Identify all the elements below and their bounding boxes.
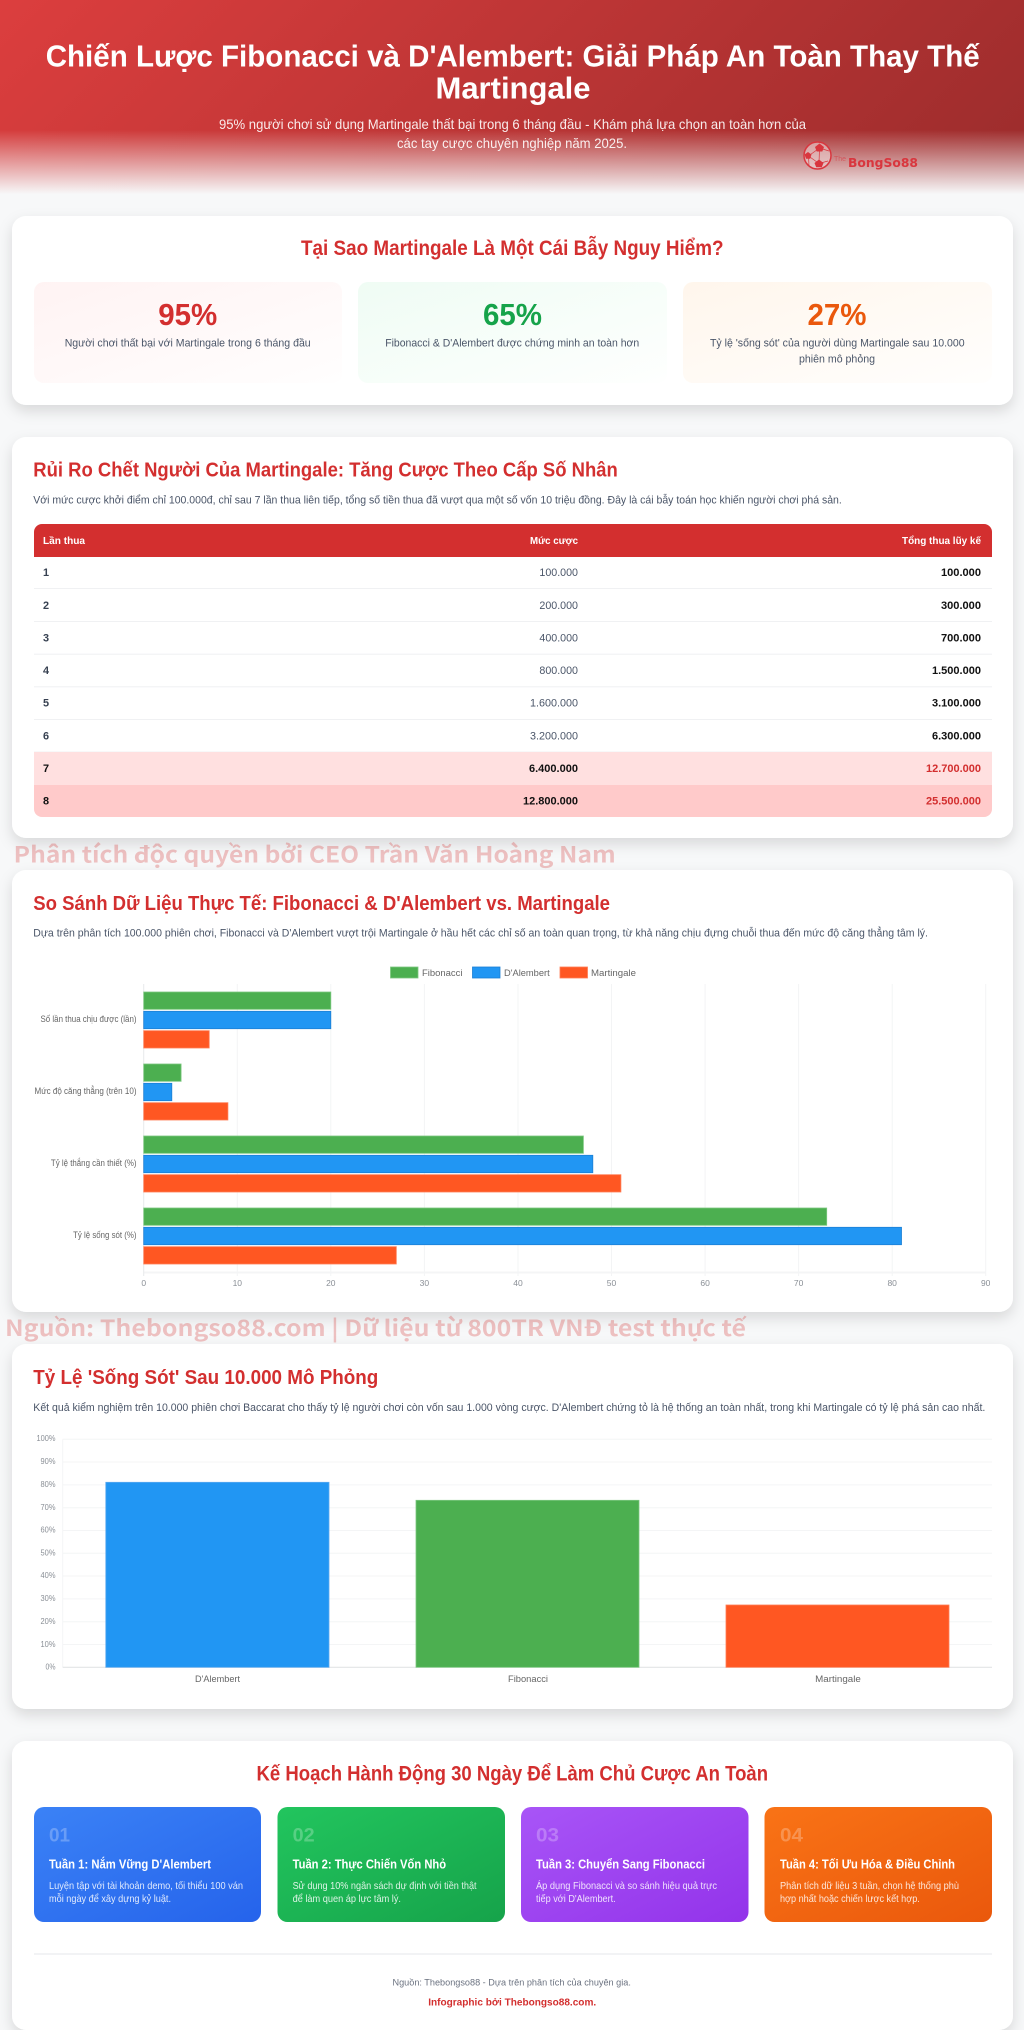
table: 4 xyxy=(43,665,49,677)
table: Lần thua xyxy=(43,535,85,547)
y axis ticks: 80% xyxy=(40,1479,56,1489)
stat card: 95%: Người chơi thất bại với Martingale trong 6 tháng đầu xyxy=(65,338,311,350)
table: 6.400.000 xyxy=(529,763,578,775)
stat card: 65%: Fibonacci & D'Alembert được chứng minh an toàn hơn xyxy=(385,338,639,350)
legend: Fibonacci xyxy=(422,968,463,978)
table: 1 xyxy=(43,567,49,579)
panel: survival rate xyxy=(12,1344,1013,1709)
y axis ticks: 100% xyxy=(36,1433,56,1443)
y axis ticks: 10% xyxy=(40,1639,56,1649)
title: Martingale xyxy=(436,72,590,106)
step card: week 4: 04 xyxy=(780,1826,803,1847)
footer source: Nguồn: Thebongso88 - Dựa trên phân tích của chuyên gia. xyxy=(392,1978,631,1989)
stat card: 65%: 65% xyxy=(483,298,542,332)
bars: Tỷ lệ thắng cần thiết: Tỷ lệ thắng cần thiết (%) xyxy=(51,1158,137,1168)
x axis ticks: 30 xyxy=(420,1278,429,1288)
table xyxy=(34,524,992,817)
legend xyxy=(390,967,636,978)
step card: week 4: hợp nhất hoặc chiến lược kết hợp. xyxy=(780,1893,920,1905)
stat card: 27%: Tỷ lệ 'sống sót' của người dùng Martingale sau 10.000 xyxy=(710,338,965,350)
step card: week 2: để làm quen áp lực tâm lý. xyxy=(293,1893,401,1905)
bars: Số lần thua chịu được: Số lần thua chịu được (lần) xyxy=(40,1014,137,1024)
table: 1.500.000 xyxy=(932,665,981,677)
table: 100.000 xyxy=(941,567,981,579)
table: 8 xyxy=(43,795,49,807)
bars: Mức độ căng thẳng xyxy=(34,1064,228,1120)
subtitle: 95% người chơi sử dụng Martingale thất bại trong 6 tháng đầu - Khám phá lựa chọn an toàn hơn của xyxy=(219,117,806,132)
panel: why Martingale is a trap xyxy=(12,216,1013,405)
step card: week 4: Phân tích dữ liệu 3 tuần, chọn hệ thống phù xyxy=(780,1880,959,1892)
step card: week 1: Tuần 1: Nắm Vững D'Alembert xyxy=(49,1857,212,1872)
bar: D'Alembert 81%: D'Alembert xyxy=(195,1674,241,1684)
table: 1.600.000 xyxy=(530,698,578,710)
title xyxy=(46,40,980,106)
stat card: 95% xyxy=(34,282,342,383)
table: 400.000 xyxy=(539,632,578,644)
step card: week 1: mỗi ngày để xây dựng kỷ luật. xyxy=(49,1892,171,1905)
subtitle xyxy=(219,117,806,151)
table: 200.000 xyxy=(539,600,578,612)
x axis ticks: 0 xyxy=(141,1278,146,1288)
legend: Martingale xyxy=(591,968,636,978)
step card: week 3: Tuần 3: Chuyển Sang Fibonacci xyxy=(536,1857,705,1872)
x axis ticks xyxy=(141,1278,991,1288)
heading: Tỷ Lệ 'Sống Sót' Sau 10.000 Mô Phỏng xyxy=(33,1367,378,1389)
heading: Kế Hoạch Hành Động 30 Ngày Để Làm Chủ Cược An Toàn xyxy=(257,1763,768,1786)
table: 300.000 xyxy=(941,600,981,612)
step card: week 4: Tuần 4: Tối Ưu Hóa & Điều Chỉnh xyxy=(780,1857,955,1872)
table: 100.000 xyxy=(539,567,578,579)
legend: D'Alembert xyxy=(504,968,550,978)
y axis ticks: 60% xyxy=(40,1524,56,1534)
x axis ticks: 90 xyxy=(981,1278,991,1288)
table: 700.000 xyxy=(941,632,981,644)
bars: Mức độ căng thẳng: Mức độ căng thẳng (trên 10) xyxy=(34,1085,137,1096)
y axis ticks: 0% xyxy=(46,1662,56,1672)
description: Với mức cược khởi điểm chỉ 100.000đ, chỉ sau 7 lần thua liên tiếp, tổng số tiền thua đã vượt qua một số vốn 10 triệu đồng. Đây là cái bẫy toán học khiến người chơi phá sản. xyxy=(33,493,842,506)
bars: Tỷ lệ thắng cần thiết xyxy=(51,1136,621,1192)
stat card: 27% xyxy=(683,282,992,383)
description: Kết quả kiểm nghiệm trên 10.000 phiên chơi Baccarat cho thấy tỷ lệ người chơi còn vốn sau 1.000 vòng cược. D'Alembert chứng tỏ là hệ thống an toàn nhất, trong khi Martingale có tỷ lệ phá sản cao nhất. xyxy=(33,1402,985,1414)
step card: week 3 xyxy=(521,1807,748,1922)
description: Dựa trên phân tích 100.000 phiên chơi, Fibonacci và D'Alembert vượt trội Martingale ở hầu hết các chỉ số an toàn quan trọng, từ khả năng chịu đựng chuỗi thua đến mức độ căng thẳng tâm lý. xyxy=(33,927,928,940)
y axis ticks: 30% xyxy=(40,1593,56,1603)
stat card: 65% xyxy=(358,282,667,383)
table: 12.800.000 xyxy=(523,795,578,807)
x axis ticks: 50 xyxy=(607,1278,616,1288)
table: 12.700.000 xyxy=(926,763,981,775)
y axis ticks: 50% xyxy=(40,1547,56,1557)
bar: Fibonacci 73% xyxy=(416,1500,639,1684)
bar: D'Alembert 81% xyxy=(106,1482,329,1684)
table: 6 xyxy=(43,730,49,742)
table: 800.000 xyxy=(539,665,578,677)
stat card: 27%: phiên mô phỏng xyxy=(799,354,875,366)
bar: Martingale 27%: Martingale xyxy=(815,1674,861,1684)
step card: week 2: 02 xyxy=(293,1826,315,1847)
step card: week 3: 03 xyxy=(536,1826,559,1847)
x axis ticks: 10 xyxy=(233,1278,242,1288)
step card: week 3: Áp dụng Fibonacci và so sánh hiệu quả trực xyxy=(536,1879,717,1892)
step card: week 2: Tuần 2: Thực Chiến Vốn Nhỏ xyxy=(293,1857,446,1872)
x axis ticks: 80 xyxy=(887,1278,897,1288)
table: 6.300.000 xyxy=(932,730,981,742)
table: Tổng thua lũy kế xyxy=(902,535,981,547)
panel: real data comparison xyxy=(12,870,1013,1312)
y axis ticks: 20% xyxy=(40,1616,56,1626)
panel: 30-day action plan xyxy=(12,1741,1013,2030)
step card: week 1: Luyện tập với tài khoản demo, tối thiểu 100 ván xyxy=(49,1880,243,1892)
y axis ticks: 40% xyxy=(40,1570,56,1580)
step card: week 2: Sử dụng 10% ngân sách dự định với tiền thật xyxy=(293,1880,477,1892)
x axis ticks: 60 xyxy=(700,1278,710,1288)
vertical bar chart xyxy=(36,1433,992,1684)
stat card: 95%: 95% xyxy=(158,298,217,332)
step card: week 2 xyxy=(278,1807,505,1922)
bars: Tỷ lệ sống sót: Tỷ lệ sống sót (%) xyxy=(73,1230,137,1240)
table: 25.500.000 xyxy=(926,795,981,807)
heading: Tại Sao Martingale Là Một Cái Bẫy Nguy Hiểm? xyxy=(301,236,724,260)
x axis ticks: 20 xyxy=(326,1278,336,1288)
table: 5 xyxy=(43,698,49,710)
table: Mức cược xyxy=(530,536,578,547)
bar: Martingale 27% xyxy=(726,1605,949,1684)
bars: Tỷ lệ sống sót xyxy=(73,1208,902,1264)
footer credit: Infographic bởi Thebongso88.com. xyxy=(428,1998,596,2009)
bar: Fibonacci 73%: Fibonacci xyxy=(508,1674,548,1684)
table: 3 xyxy=(43,632,49,644)
heading: So Sánh Dữ Liệu Thực Tế: Fibonacci & D'Alembert vs. Martingale xyxy=(33,893,610,915)
horizontal bar chart xyxy=(34,984,991,1288)
step card: week 1: 01 xyxy=(49,1826,70,1847)
table: 7 xyxy=(43,763,49,775)
logo: BongSo88 xyxy=(804,142,918,170)
y axis ticks: 90% xyxy=(40,1456,56,1466)
bars: Số lần thua chịu được xyxy=(40,992,331,1048)
step card: week 1 xyxy=(34,1807,261,1922)
x axis ticks: 70 xyxy=(794,1278,804,1288)
table: 3.100.000 xyxy=(932,698,981,710)
heading: Rủi Ro Chết Người Của Martingale: Tăng Cược Theo Cấp Số Nhân xyxy=(33,460,618,482)
logo: BongSo88: The xyxy=(834,154,846,163)
logo: BongSo88: BongSo88 xyxy=(848,155,918,170)
step card: week 4 xyxy=(764,1807,992,1922)
table: 3.200.000 xyxy=(530,730,578,742)
table: 2 xyxy=(43,600,49,612)
x axis ticks: 40 xyxy=(513,1278,523,1288)
watermark: CEO analysis: Phân tích độc quyền bởi CEO Trần Văn Hoàng Nam xyxy=(14,838,616,870)
title: Chiến Lược Fibonacci và D'Alembert: Giải Pháp An Toàn Thay Thế xyxy=(46,40,980,74)
panel: Martingale risk table xyxy=(12,437,1013,838)
y axis ticks: 70% xyxy=(40,1502,56,1512)
y axis ticks xyxy=(36,1433,56,1672)
header banner xyxy=(0,0,1024,194)
step card: week 3: tiếp với D'Alembert. xyxy=(536,1893,616,1905)
subtitle: các tay cược chuyên nghiệp năm 2025. xyxy=(397,136,627,151)
watermark: source: Nguồn: Thebongso88.com | Dữ liệu từ 800TR VNĐ test thực tế xyxy=(5,1311,747,1343)
stat card: 27%: 27% xyxy=(808,298,866,332)
